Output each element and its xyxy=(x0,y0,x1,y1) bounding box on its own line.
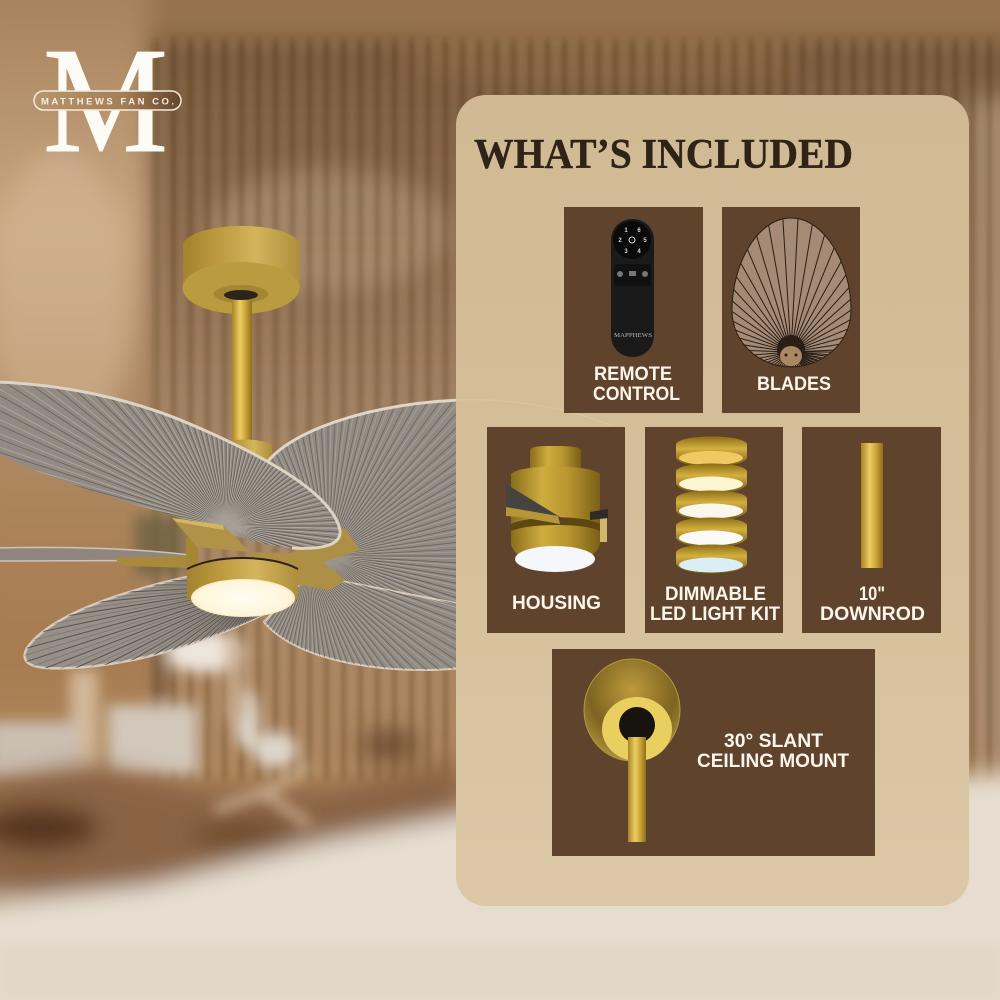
icon: remote: 2 xyxy=(618,238,622,244)
downrod xyxy=(232,300,252,442)
label: HOUSING xyxy=(512,593,601,614)
icon: downrod xyxy=(861,443,883,568)
icon: remote: 6 xyxy=(637,228,641,234)
right blade xyxy=(267,398,456,602)
gold brackets xyxy=(113,528,360,590)
label: REMOTE xyxy=(594,364,672,385)
ceiling canopy xyxy=(182,226,300,314)
label xyxy=(697,731,849,772)
card: housing xyxy=(487,427,625,633)
LED light xyxy=(191,579,295,617)
card: LED light kit xyxy=(645,427,783,633)
label: BLADES xyxy=(757,374,831,395)
card: ceiling mount xyxy=(552,649,875,856)
icon: remote: MAPPHEWS xyxy=(614,332,652,339)
icon: housing xyxy=(506,446,608,572)
label xyxy=(820,584,925,625)
far-left thin blade xyxy=(0,547,190,561)
icon: remote xyxy=(611,219,654,357)
card: blades xyxy=(722,207,860,413)
rod coupling xyxy=(231,440,272,460)
icon: palm blade xyxy=(732,218,852,368)
top-left blade xyxy=(0,380,342,550)
label: 10" xyxy=(859,584,885,605)
label: DOWNROD xyxy=(820,604,925,625)
label xyxy=(650,584,780,625)
card: downrod xyxy=(802,427,941,633)
ceiling fan xyxy=(0,226,456,671)
label xyxy=(593,364,680,405)
label: CEILING MOUNT xyxy=(697,751,849,772)
icon: slant mount xyxy=(584,659,680,842)
panel: what's included xyxy=(456,95,1000,906)
lower right blade xyxy=(262,580,456,671)
icon: remote: 5 xyxy=(643,238,647,244)
icon: remote: 4 xyxy=(637,249,641,255)
front bracket xyxy=(172,518,250,552)
label: LED LIGHT KIT xyxy=(650,604,780,625)
heading: WHAT’S INCLUDED xyxy=(474,132,853,178)
card: remote control xyxy=(564,207,703,413)
label: DIMMABLE xyxy=(665,584,766,605)
icon: remote: 1 xyxy=(624,228,628,234)
motor housing xyxy=(186,557,298,603)
label: CONTROL xyxy=(593,384,680,405)
icon: remote: 3 xyxy=(624,249,628,255)
icon: stacked light kits xyxy=(676,436,747,574)
logo: MATTHEWS FAN CO. xyxy=(41,96,174,108)
label: 30° SLANT xyxy=(724,731,823,752)
lower left blade xyxy=(23,576,264,670)
logo: M xyxy=(43,16,168,184)
